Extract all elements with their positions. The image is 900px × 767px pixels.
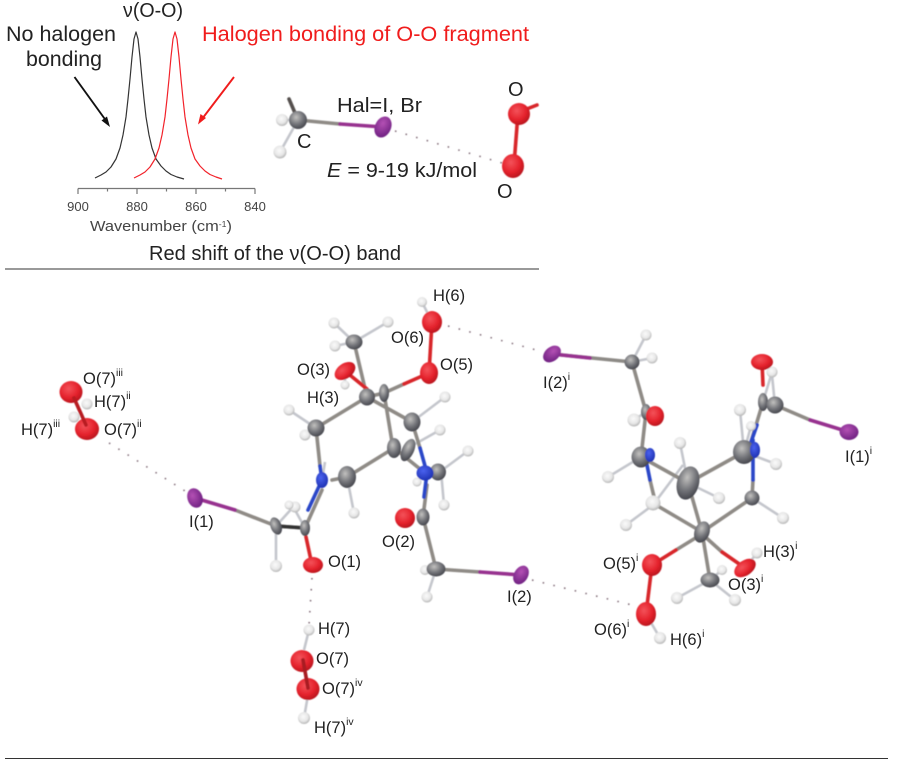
molecule: central <box>185 297 540 625</box>
atom labels: i <box>568 371 570 383</box>
atom labels: H(3) <box>307 389 339 407</box>
axis tick labels: 900 <box>67 199 89 214</box>
chart: IR spectrum <box>67 32 266 235</box>
hydrogens <box>270 297 474 602</box>
atom labels: i <box>870 445 872 457</box>
atom labels: iii <box>53 418 60 430</box>
atom labels: iii <box>116 367 123 379</box>
atom labels: O(5) <box>603 555 636 573</box>
label: no halogen bonding: bonding <box>26 48 102 71</box>
atom labels: I(1) <box>189 513 214 531</box>
diagram: halogen bond model fragment <box>274 79 537 203</box>
atom labels: iv <box>346 716 354 728</box>
arrow: red, pointing to red peak <box>198 77 234 124</box>
curve: red peak <box>134 32 222 179</box>
atom labels: i <box>761 573 763 585</box>
axis tick labels: 860 <box>185 199 207 214</box>
atom labels <box>21 287 872 737</box>
iodines <box>185 486 205 510</box>
divider <box>5 268 539 270</box>
molecule: water fragment upper left <box>60 381 185 491</box>
atom labels: O(6) <box>391 329 424 347</box>
atom labels: ii <box>137 418 142 430</box>
label: halogen bonding of O-O fragment: Halogen bonding of O-O fragment <box>202 23 529 46</box>
oxygens <box>303 311 442 573</box>
atom labels: O(7) <box>322 680 355 698</box>
x axis <box>78 188 255 194</box>
curve: black peak <box>95 32 184 179</box>
atom labels: H(7) <box>314 719 346 737</box>
diagram: halogen bond model fragment: O <box>508 79 524 101</box>
atom labels: I(1) <box>845 448 870 466</box>
iodine 1 bond <box>235 510 276 526</box>
atom labels: O(2) <box>382 533 415 551</box>
atom labels: H(6) <box>433 287 465 305</box>
caption: red shift: Red shift of the ν(O-O) band <box>149 243 401 265</box>
atom labels: O(3) <box>728 576 761 594</box>
atom labels: ii <box>126 390 131 402</box>
model labels: Hal=I, Br <box>337 94 422 117</box>
model atoms and bonds <box>274 99 537 178</box>
arrow: black, pointing to black peak <box>74 77 110 127</box>
diagram: halogen bond model fragment: O <box>497 181 513 203</box>
axis tick labels <box>67 199 266 214</box>
axis title: Wavenumber (cm <box>90 218 208 235</box>
carbons <box>268 334 446 576</box>
atom labels: i <box>627 618 629 630</box>
atom labels: O(7) <box>316 650 349 668</box>
label: no halogen bonding: No halogen <box>6 23 116 46</box>
atom labels: iv <box>355 677 363 689</box>
atom labels: I(2) <box>507 588 532 606</box>
molecule: water fragment lower <box>290 624 320 724</box>
atom labels: i <box>795 540 797 552</box>
diagram: halogen bond model fragment: C <box>297 131 311 153</box>
heading: nu(O-O) peak label: ν(O-O) <box>123 0 183 22</box>
axis tick labels: 880 <box>126 199 148 214</box>
bottom divider <box>5 758 888 760</box>
atom labels: H(7) <box>94 393 126 411</box>
atom labels: I(2) <box>543 374 568 392</box>
atom labels: O(7) <box>104 421 137 439</box>
atom labels: H(6) <box>670 631 702 649</box>
atom labels: O(5) <box>440 356 473 374</box>
atom labels: i <box>702 628 704 640</box>
hydrogen bonds to carbons <box>276 302 468 597</box>
atom labels: H(3) <box>763 543 795 561</box>
atom labels: O(7) <box>83 370 116 388</box>
label: no halogen bonding <box>6 23 116 71</box>
nitrogens <box>316 472 328 488</box>
molecule: symmetry-related right <box>532 330 858 644</box>
axis tick labels: 840 <box>244 199 266 214</box>
atom labels: O(6) <box>594 621 627 639</box>
axis title: ) <box>227 218 232 235</box>
atom labels: i <box>636 552 638 564</box>
atom labels: O(1) <box>328 553 361 571</box>
atom labels: H(7) <box>21 421 53 439</box>
atom labels: O(3) <box>297 361 330 379</box>
axis title: -1 <box>219 220 227 229</box>
diagram: halogen bond model fragment: E = 9-19 kJ/mol <box>327 159 477 182</box>
atom labels: H(7) <box>318 620 350 638</box>
